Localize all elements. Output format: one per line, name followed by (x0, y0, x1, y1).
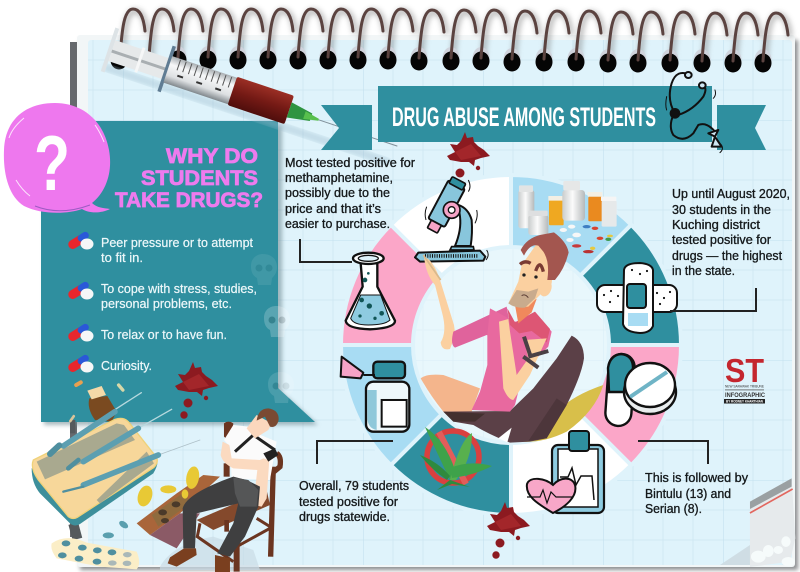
circular ring (341, 175, 681, 515)
text: statewide: drugs statewide. (299, 510, 390, 524)
ring segment: microscope (391, 175, 511, 276)
logo: New Sarawak Tribune: ST (725, 352, 764, 389)
blood splat panel (175, 362, 218, 419)
text: statewide: Overall, 79 students (299, 479, 409, 493)
illustration: student on chair (135, 408, 280, 572)
panel heading: STUDENTS (141, 167, 258, 190)
blood splat top (447, 132, 490, 189)
ring segment: medicines (511, 175, 631, 276)
icon: capsule and tablet (605, 353, 676, 427)
icon: prohibited cannabis (420, 427, 492, 490)
bullet: relax (67, 323, 227, 343)
coins (135, 465, 201, 508)
icon: clipboard and heart (527, 431, 604, 513)
blood splat bottom (487, 502, 530, 559)
ring segment: flask (341, 225, 442, 345)
small pill bottle (87, 386, 117, 422)
logo: New Sarawak Tribune: INFOGRAPHIC (725, 392, 765, 399)
logo: New Sarawak Tribune (724, 352, 765, 404)
logo: New Sarawak Tribune: BY RODNEY KHARTHIAN (726, 400, 763, 404)
text: Kuching: in the state. (672, 264, 735, 278)
text: methamphetamine: easier to purchase. (285, 217, 390, 231)
leader line: statewide (317, 441, 393, 464)
panel heading: TAKE DRUGS? (115, 189, 263, 212)
text: Bintulu and Serian: This is followed by (645, 471, 749, 485)
text: methamphetamine: methamphetamine, (285, 171, 393, 185)
text: Bintulu and Serian (645, 471, 749, 516)
icon: microscope (415, 176, 488, 262)
medicines photo (518, 181, 617, 253)
ring segment: bottle (341, 345, 442, 465)
ring segment: clipboard (511, 414, 631, 515)
text: Bintulu and Serian: Serian (8). (645, 502, 702, 516)
bullet: relax: To relax or to have fun. (101, 328, 227, 342)
leader line: methamphetamine (300, 239, 352, 262)
text: statewide (299, 479, 409, 524)
question mark speech bubble: ? (34, 119, 70, 207)
text: Kuching (672, 187, 790, 278)
blister pack (51, 538, 139, 569)
leader line: Kuching (670, 288, 756, 311)
text: Bintulu and Serian: Bintulu (13) and (645, 487, 731, 501)
title banner (321, 86, 766, 150)
student body (168, 408, 279, 572)
icon: bandage (597, 263, 677, 333)
bullet: stress: To cope with stress, studies, (101, 282, 257, 296)
bullet: stress (67, 281, 257, 311)
text: Kuching: Kuching district (672, 218, 761, 232)
bullet: peer pressure: Peer pressure or to attempt (101, 236, 254, 250)
text: methamphetamine: Most tested positive for (285, 156, 415, 170)
text: Kuching: drugs — the highest (672, 249, 783, 263)
capsules (68, 380, 125, 423)
ring segment: pills (580, 345, 681, 465)
icon: stethoscope (666, 72, 722, 153)
leader line: Bintulu (638, 441, 708, 464)
panel: why do students take drugs (41, 121, 318, 425)
icon: flask (346, 253, 395, 329)
logo: New Sarawak Tribune: NEW SARAWAK TRIBUNE (725, 384, 764, 388)
bullet: peer pressure: to fit in. (101, 251, 143, 265)
illustration: tray of syringes (32, 380, 200, 569)
spiral binding (110, 9, 790, 72)
panel heading (115, 145, 263, 212)
ring segment: cannabis (391, 414, 511, 515)
icon: medicine bottle (341, 357, 409, 432)
bullet: stress: personal problems, etc. (101, 297, 232, 311)
text: methamphetamine: price and that it’s (285, 202, 381, 216)
question mark speech bubble (4, 103, 110, 213)
text: methamphetamine: possibly due to the (285, 186, 390, 200)
panel heading: WHY DO (166, 145, 258, 168)
text: Kuching: tested positive for (672, 233, 771, 247)
faint skulls (251, 254, 294, 403)
central student figure (421, 232, 603, 443)
ring segment: bandage (580, 225, 681, 345)
bullet: peer pressure (67, 231, 254, 265)
text: statewide: tested positive for (299, 495, 398, 509)
chair (197, 422, 280, 572)
bullet: curiosity (67, 354, 152, 374)
icon: plastic bag of pills (750, 478, 795, 567)
syringe (100, 27, 405, 169)
text: Kuching: Up until August 2020, (672, 187, 790, 201)
text: methamphetamine (285, 156, 415, 231)
bullet: curiosity: Curiosity. (101, 359, 152, 373)
cardboard box (137, 475, 220, 548)
blue pills (103, 519, 129, 538)
text: Kuching: 30 students in the (672, 203, 771, 217)
